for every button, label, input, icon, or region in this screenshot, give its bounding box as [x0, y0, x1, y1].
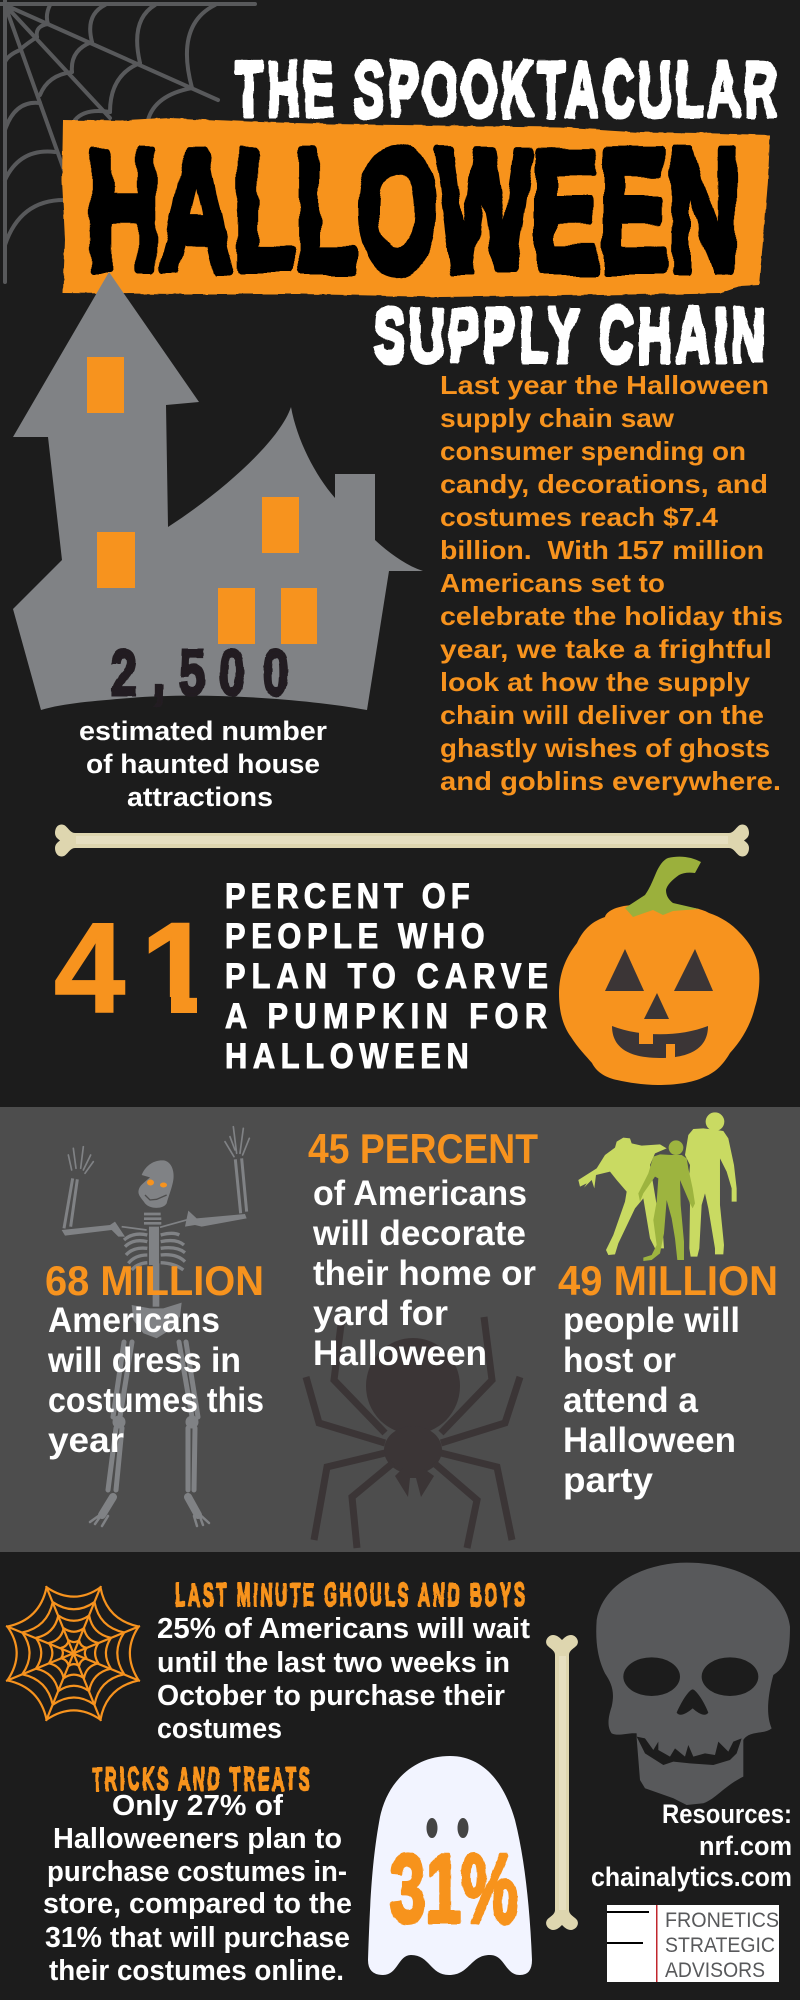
- intro paragraph: celebrate the holiday this: [440, 601, 783, 631]
- text: last minute shoppers: costumes: [157, 1713, 282, 1745]
- stat block: 45 percent: their home or: [313, 1254, 536, 1293]
- stat: 41: 1: [141, 897, 212, 1040]
- icon: skeleton: [62, 1127, 249, 1526]
- pumpkin statement: PERCENT OF: [225, 876, 470, 915]
- intro paragraph: ghastly wishes of ghosts: [440, 733, 770, 763]
- text: online versus in-store: purchase costumes in-: [47, 1856, 347, 1888]
- intro paragraph: supply chain saw: [440, 403, 675, 433]
- intro paragraph: and goblins everywhere.: [440, 766, 781, 796]
- house windows: [87, 357, 317, 644]
- stat: 41: [54, 897, 221, 1040]
- intro paragraph: costumes reach $7.4: [440, 502, 719, 532]
- stat block: 45 percent: Halloween: [313, 1334, 487, 1373]
- pumpkin statement: [225, 876, 548, 1075]
- icon: zombies: [578, 1112, 737, 1261]
- text: online versus in-store: 31% that will purchase: [45, 1922, 350, 1954]
- title: supply chain: SUPPLY CHAIN: [374, 292, 765, 379]
- text: online versus in-store: Halloweeners plan to: [53, 1823, 342, 1855]
- stat: 41: 4: [54, 897, 125, 1040]
- heading: tricks and treats: TRICKS AND TREATS: [92, 1762, 310, 1798]
- intro paragraph: consumer spending on: [440, 436, 746, 466]
- text: online versus in-store: Only 27% of: [112, 1790, 283, 1822]
- icon: orange spider web: [6, 1586, 140, 1721]
- heading: last minute ghouls and boys: LAST MINUTE GHOULS AND BOYS: [175, 1578, 525, 1614]
- logo: fronetics strategic advisors: FRONETICS: [665, 1909, 779, 1932]
- vertical bone divider: [546, 1635, 578, 1930]
- stat block: 49 million: attend a: [563, 1381, 699, 1420]
- intro paragraph: candy, decorations, and: [440, 469, 768, 499]
- logo: fronetics strategic advisors: STRATEGIC: [665, 1934, 775, 1957]
- stat block: 45 percent: of Americans: [313, 1174, 527, 1213]
- text: last minute shoppers: [157, 1613, 530, 1745]
- stat block: 49 million: people will: [563, 1301, 740, 1340]
- stat block: 45 percent: [308, 1125, 538, 1373]
- text: online versus in-store: store, compared to the: [43, 1888, 352, 1920]
- skeleton eyes: [147, 1180, 167, 1188]
- logo: fronetics strategic advisors: [607, 1905, 779, 1982]
- stat block: 68 million: 68 MILLION: [45, 1257, 264, 1304]
- icon: jack-o-lantern pumpkin: [559, 857, 759, 1085]
- intro paragraph: year, we take a frightful: [440, 634, 772, 664]
- intro paragraph: billion. With 157 million: [440, 535, 764, 565]
- stat block: 49 million: host or: [563, 1341, 676, 1380]
- logo: fronetics strategic advisors: ADVISORS: [665, 1959, 765, 1982]
- title: the spooktacular: THE SPOOKTACULAR: [235, 45, 777, 133]
- stat block: 49 million: Halloween: [563, 1421, 736, 1460]
- stat block: 49 million: party: [563, 1461, 654, 1500]
- caption: haunted house attractions: attractions: [127, 782, 273, 812]
- caption: haunted house attractions: of haunted house: [86, 749, 320, 779]
- panel: grey statistics band: [0, 1107, 800, 1552]
- icon: spider: [306, 1317, 520, 1548]
- stat block: 45 percent: yard for: [313, 1294, 448, 1333]
- orange banner: [62, 118, 770, 297]
- text: online versus in-store: [43, 1790, 352, 1987]
- stat block: 68 million: Americans: [48, 1301, 220, 1340]
- intro paragraph: Americans set to: [440, 568, 665, 598]
- intro paragraph: Last year the Halloween: [440, 370, 769, 400]
- intro paragraph: chain will deliver on the: [440, 700, 764, 730]
- stat block: 49 million: 49 MILLION: [558, 1257, 778, 1304]
- stat block: 68 million: [45, 1257, 264, 1460]
- stat: 2,500: 2,500: [111, 638, 289, 710]
- stat block: 68 million: year: [48, 1421, 124, 1460]
- text: last minute shoppers: 25% of Americans will wait: [157, 1613, 530, 1645]
- pumpkin statement: HALLOWEEN: [225, 1036, 469, 1075]
- stat block: 68 million: will dress in: [47, 1341, 241, 1380]
- stat block: 68 million: costumes this: [48, 1381, 264, 1420]
- icon: skull: [596, 1563, 790, 1805]
- stat block: 45 percent: 45 PERCENT: [308, 1125, 538, 1172]
- caption: haunted house attractions: estimated number: [79, 716, 328, 746]
- intro paragraph: [440, 370, 783, 796]
- resources: [591, 1799, 792, 1892]
- text: last minute shoppers: October to purchase their: [157, 1680, 505, 1712]
- haunted house illustration: [13, 272, 423, 710]
- pumpkin statement: PLAN TO CARVE: [225, 956, 548, 995]
- caption: haunted house attractions: [79, 716, 328, 812]
- pumpkin statement: A PUMPKIN FOR: [225, 996, 547, 1035]
- resources: nrf.com: [699, 1831, 792, 1861]
- icon: ghost with 31 percent: 31%: [390, 1834, 518, 1943]
- text: last minute shoppers: until the last two weeks in: [157, 1647, 510, 1679]
- text: online versus in-store: their costumes online.: [49, 1955, 344, 1987]
- icon: ghost with 31 percent: [368, 1756, 532, 1975]
- stat block: 49 million: [558, 1257, 778, 1500]
- horizontal bone divider: [55, 825, 749, 856]
- intro paragraph: look at how the supply: [440, 667, 751, 697]
- stat block: 45 percent: will decorate: [312, 1214, 526, 1253]
- pumpkin statement: PEOPLE WHO: [225, 916, 485, 955]
- corner spider web: [0, 0, 255, 282]
